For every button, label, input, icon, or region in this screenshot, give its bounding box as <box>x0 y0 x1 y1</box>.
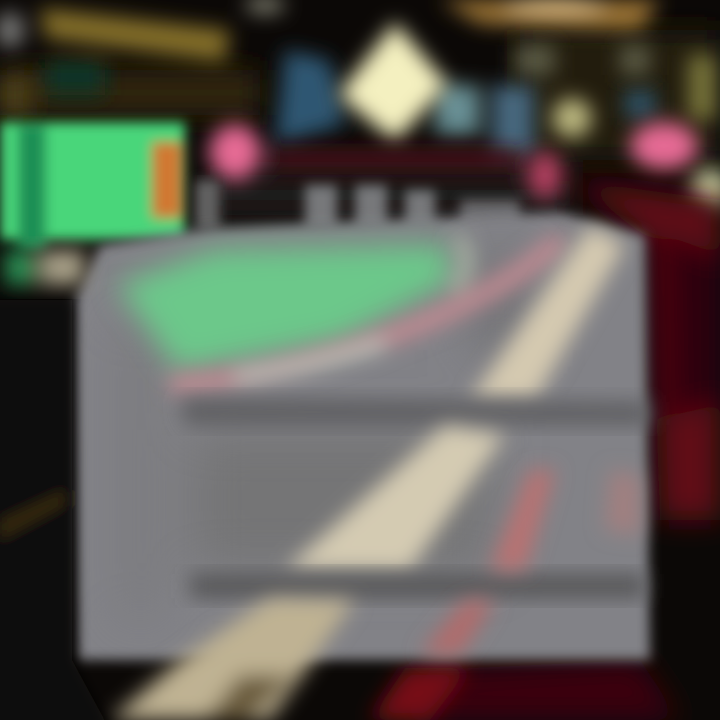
marks: bottom red streak <box>370 668 470 720</box>
track: cream diagonal lane bottom <box>110 598 355 720</box>
screen: bright green scoreboard <box>0 122 185 250</box>
pale patch: left edge of field <box>5 250 85 285</box>
track: dark horizontal band lower <box>190 574 645 598</box>
track: cream diagonal lane lower <box>285 425 505 570</box>
track: cream diagonal lane upper <box>470 225 625 400</box>
lights: small yellow and beige globes <box>515 45 720 208</box>
block: dark left foreground wall <box>0 300 110 720</box>
panel: grey track surface <box>75 212 650 660</box>
panel shading: darker grey in lower region <box>120 260 530 620</box>
pitch: pink and white curved border <box>178 240 555 384</box>
pillars: row of grey columns <box>195 180 520 230</box>
pitch: green playing field <box>118 245 455 370</box>
stands: red seating on the right <box>400 180 720 720</box>
track: red dashed lane marks <box>420 470 640 655</box>
lights: white diamond chandelier <box>338 22 448 142</box>
lights: blue hanging panels <box>275 50 655 155</box>
lights: gold ceiling strips <box>0 0 716 120</box>
upper stands: dim brown band <box>0 30 720 215</box>
track: dark horizontal band upper <box>180 398 650 425</box>
signs: pink blobs <box>209 122 698 199</box>
